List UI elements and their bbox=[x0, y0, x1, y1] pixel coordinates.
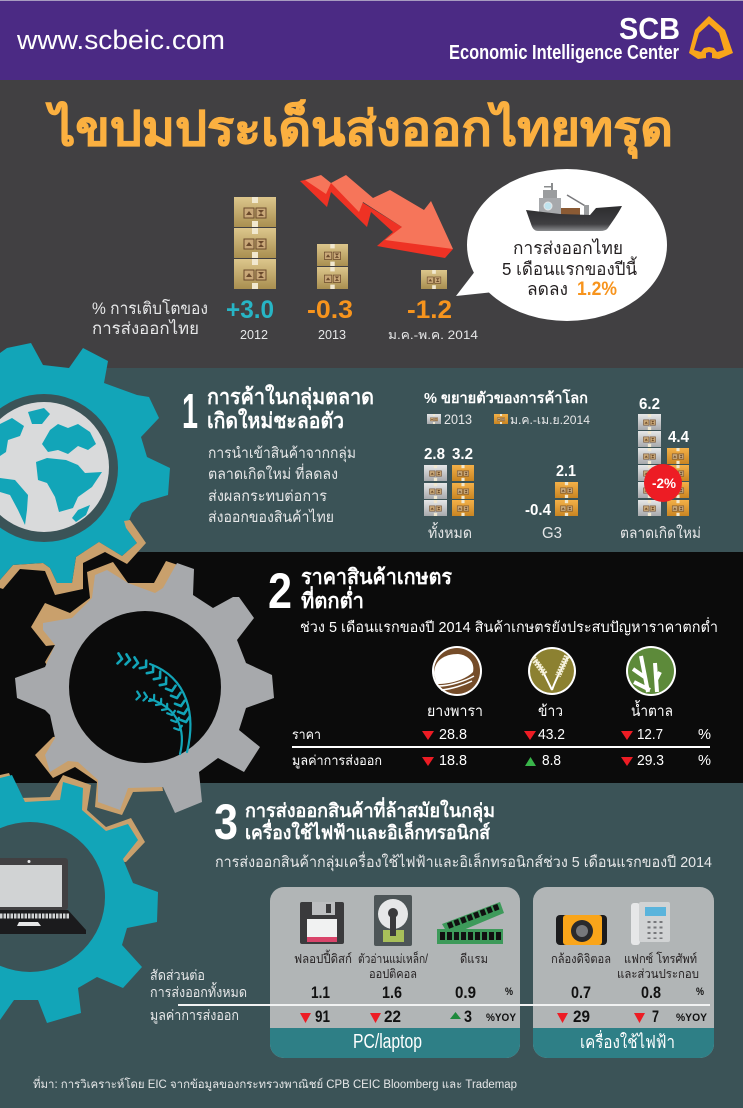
chart: emerging markets: ตลาดเกิดใหม่ bbox=[620, 524, 701, 542]
callout: speech bubble bbox=[456, 169, 667, 321]
table: price and export value: มูลค่าการส่งออก bbox=[292, 753, 382, 769]
table: price and export value: 18.8 bbox=[439, 752, 467, 769]
gear outline lower bbox=[35, 735, 163, 815]
gear 1: globe bbox=[0, 343, 170, 595]
card: appliances: เครื่องใช้ไฟฟ้า bbox=[580, 1030, 675, 1052]
share values: % bbox=[505, 986, 513, 998]
label: growth of Thai exports: % การเติบโตของ bbox=[92, 299, 208, 318]
number 2: 2 bbox=[268, 563, 292, 619]
icon: floppy disk bbox=[300, 902, 344, 944]
gear outline upper bbox=[31, 561, 178, 680]
chart: emerging markets: -2% bbox=[652, 475, 677, 491]
export value changes: 3 bbox=[464, 1008, 472, 1026]
chart: emerging markets: 6.2 bbox=[639, 396, 660, 413]
icon: rice bbox=[528, 647, 576, 695]
bubble text: 5 เดือนแรกของปีนี้ bbox=[502, 256, 637, 279]
subtitle 2: ช่วง 5 เดือนแรกของปี 2014 สินค้าเกษตรยังประสบปัญหาราคาตกต่ำ bbox=[300, 617, 718, 636]
product labels bbox=[294, 949, 699, 981]
table: price and export value: 28.8 bbox=[439, 726, 467, 743]
table divider bbox=[178, 1004, 710, 1006]
chart: emerging markets: 4.4 bbox=[668, 429, 689, 446]
product labels: แฟกซ์ โทรศัพท์ bbox=[624, 951, 697, 966]
table: price and export value: 29.3 bbox=[637, 752, 664, 769]
table: price and export value: ราคา bbox=[292, 727, 321, 742]
year labels bbox=[240, 327, 478, 342]
icon: SCB logo bbox=[689, 16, 733, 59]
card: PC/laptop bbox=[270, 887, 520, 1058]
boxes 2013 bbox=[317, 244, 348, 289]
label: growth of Thai exports: การส่งออกไทย bbox=[92, 319, 199, 338]
commodity labels: ข้าว bbox=[538, 703, 563, 720]
icon: telephone bbox=[631, 902, 670, 945]
share values bbox=[311, 984, 704, 1002]
icon: RAM bbox=[437, 902, 504, 944]
product labels: กล้องดิจิตอล bbox=[551, 952, 611, 966]
icon: rubber bbox=[432, 646, 482, 696]
bubble text: ลดลง bbox=[527, 279, 568, 299]
row labels: สัดส่วนต่อ bbox=[150, 967, 205, 983]
product labels: และส่วนประกอบ bbox=[617, 967, 699, 981]
table: price and export value: 12.7 bbox=[637, 726, 663, 743]
legend: 2013 bbox=[444, 411, 472, 427]
bubble text: การส่งออกไทย bbox=[513, 238, 623, 258]
card: appliances bbox=[533, 887, 714, 1058]
heading 3: เครื่องใช้ไฟฟ้าและอิเล็กทรอนิกส์ bbox=[245, 819, 490, 844]
icon: cargo ship bbox=[526, 183, 622, 231]
website url: www.scbeic.com bbox=[16, 25, 225, 55]
table: price and export value: % bbox=[698, 752, 711, 769]
gear outline bbox=[0, 520, 146, 595]
heading 3: การส่งออกสินค้าที่ล้าสมัยในกลุ่ม bbox=[245, 797, 495, 823]
SCB wordmark: SCB bbox=[619, 11, 680, 46]
boxes 2012 bbox=[234, 197, 276, 289]
product labels: ออปติคอล bbox=[369, 967, 417, 981]
product labels: ฟลอปปี้ดิสก์ bbox=[294, 949, 352, 966]
product labels: ตัวอ่านแม่เหล็ก/ bbox=[358, 951, 428, 966]
Economic Intelligence Center: Economic Intelligence Center bbox=[449, 42, 679, 64]
heading 1 bbox=[207, 383, 374, 433]
title: ไขปมประเด็นส่งออกไทยทรุด bbox=[45, 99, 673, 159]
share values: 1.1 bbox=[311, 984, 330, 1002]
icon: sugar cane bbox=[626, 646, 676, 696]
label: growth of Thai exports bbox=[92, 299, 208, 338]
body text 1: ตลาดเกิดใหม่ ที่ลดลง bbox=[208, 463, 338, 483]
gear 3: laptop bbox=[0, 773, 158, 1023]
legend: ม.ค.-เม.ย.2014 bbox=[510, 413, 590, 427]
table: price and export value: % bbox=[698, 726, 711, 743]
share values: % bbox=[696, 986, 704, 998]
chart: total: ทั้งหมด bbox=[428, 522, 472, 542]
table: price and export value: 43.2 bbox=[538, 726, 565, 743]
product labels: ดีแรม bbox=[460, 952, 488, 966]
body text 1: ส่งผลกระทบต่อการ bbox=[208, 488, 327, 505]
gear 2: rice bbox=[15, 561, 274, 815]
chart: G3: G3 bbox=[542, 525, 562, 542]
value -1.2: -1.2 bbox=[407, 296, 452, 324]
boxes 2014 bbox=[421, 270, 447, 289]
value -0.3: -0.3 bbox=[307, 296, 353, 324]
chart: G3: -0.4 bbox=[525, 502, 551, 519]
icon: laptop bbox=[0, 858, 86, 934]
export value changes: 91 bbox=[315, 1008, 330, 1026]
chart: G3: 2.1 bbox=[556, 463, 576, 480]
chart: total bbox=[424, 446, 474, 542]
card: PC/laptop: PC/laptop bbox=[353, 1031, 422, 1053]
export value changes: 22 bbox=[384, 1008, 401, 1026]
commodity labels bbox=[427, 700, 673, 720]
share values: 0.9 bbox=[455, 984, 476, 1002]
row labels: การส่งออกทั้งหมด bbox=[150, 982, 247, 1000]
subtitle 3: การส่งออกสินค้ากลุ่มเครื่องใช้ไฟฟ้าและอิเล็กทรอนิกส์ช่วง 5 เดือนแรกของปี 2014 bbox=[215, 851, 712, 872]
number 1: 1 bbox=[182, 385, 198, 439]
panel 3: electronics exports bbox=[150, 794, 714, 1058]
chart: export growth boxes bbox=[92, 197, 478, 342]
chart: total: 3.2 bbox=[452, 446, 473, 463]
header bar bbox=[0, 0, 743, 80]
export value changes: %YOY bbox=[486, 1012, 517, 1024]
share values: 0.8 bbox=[641, 984, 661, 1002]
icon: camera bbox=[556, 915, 607, 945]
heading 1: การค้าในกลุ่มตลาด bbox=[207, 383, 374, 411]
body text 1 bbox=[208, 445, 356, 526]
bubble text: 1.2% bbox=[577, 279, 617, 300]
icon: rice plant bbox=[118, 653, 190, 754]
chart: total: 2.8 bbox=[424, 446, 445, 463]
heading 2: ราคาสินค้าเกษตร bbox=[301, 565, 453, 589]
number 3: 3 bbox=[214, 794, 238, 850]
value +3.0: +3.0 bbox=[226, 296, 274, 324]
export value changes: 29 bbox=[573, 1008, 590, 1026]
chart: G3 bbox=[525, 463, 578, 542]
row labels bbox=[150, 967, 247, 1024]
year labels: 2012 bbox=[240, 327, 268, 342]
panel 1: emerging-market trade bbox=[182, 383, 701, 542]
export value changes: 7 bbox=[652, 1008, 659, 1026]
export value changes bbox=[300, 1008, 708, 1026]
legend bbox=[427, 411, 590, 427]
heading 2: ที่ตกต่ำ bbox=[301, 585, 364, 613]
heading 3 bbox=[245, 797, 495, 844]
chart heading: % ขยายตัวของการค้าโลก bbox=[424, 388, 588, 407]
body text 1: ส่งออกของสินค้าไทย bbox=[208, 508, 334, 526]
share values: 1.6 bbox=[382, 984, 402, 1002]
share values: 0.7 bbox=[571, 984, 591, 1002]
icon: globe bbox=[0, 402, 109, 532]
heading 1: เกิดใหม่ชะลอตัว bbox=[207, 407, 344, 433]
export value changes: %YOY bbox=[676, 1012, 708, 1024]
arrow: falling exports bbox=[300, 175, 453, 258]
commodity labels: ยางพารา bbox=[427, 703, 483, 720]
icon: hard disk bbox=[374, 895, 412, 946]
bubble text bbox=[502, 238, 637, 300]
year labels: ม.ค.-พ.ค. 2014 bbox=[388, 328, 478, 342]
row labels: มูลค่าการส่งออก bbox=[150, 1007, 239, 1024]
source note: ที่มา: การวิเคราะห์โดย EIC จากข้อมูลของกระทรวงพาณิชย์ CPB CEIC Bloomberg และ Trademap bbox=[33, 1076, 517, 1091]
year labels: 2013 bbox=[318, 327, 346, 342]
body text 1: การนำเข้าสินค้าจากกลุ่ม bbox=[208, 445, 356, 463]
chart: emerging markets bbox=[620, 396, 701, 542]
table: price and export value: 8.8 bbox=[542, 752, 561, 769]
heading 2 bbox=[301, 565, 453, 613]
commodity labels: น้ำตาล bbox=[631, 700, 673, 720]
table: price and export value bbox=[292, 726, 711, 769]
panel 2: agricultural prices bbox=[268, 563, 718, 769]
